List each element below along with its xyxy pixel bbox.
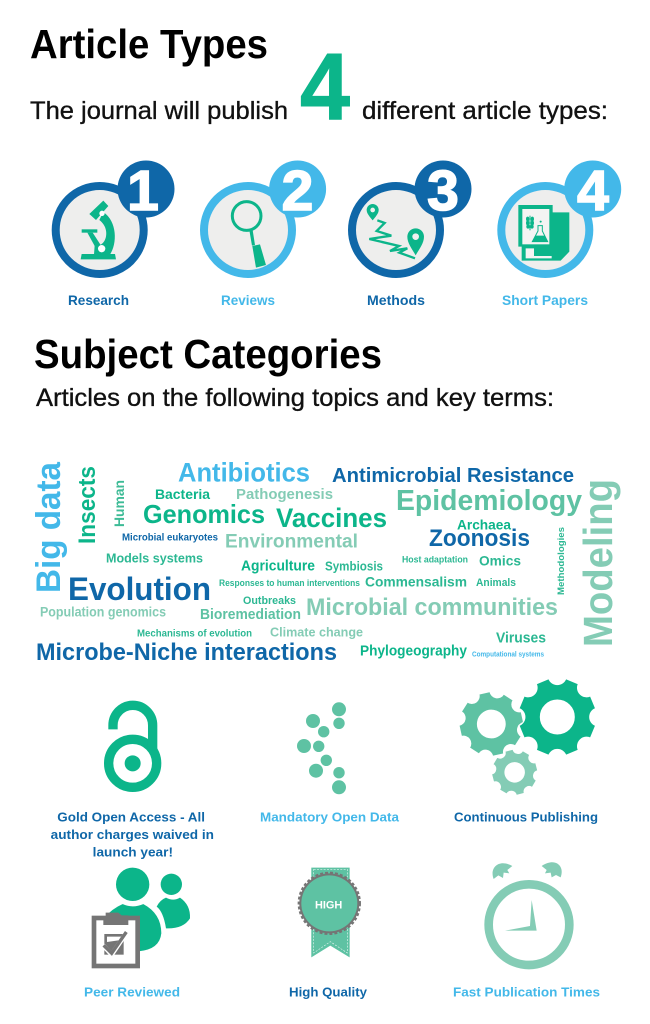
word: Bacteria: Bacteria [155, 487, 210, 502]
word: Genomics: Genomics [143, 499, 265, 529]
word: Epidemiology: Epidemiology [396, 485, 582, 517]
icon: alarm clock [489, 862, 569, 965]
word: Phylogeography: Phylogeography [360, 642, 468, 660]
word: Models systems: Models systems [106, 550, 203, 566]
heading: Subject Categories: Subject Categories [34, 331, 382, 377]
word: Antibiotics: Antibiotics [178, 458, 310, 488]
word: Omics: Omics [479, 552, 521, 568]
label: Research: Research [68, 292, 129, 308]
word: Insects: Insects [74, 466, 101, 544]
label: Gold Open Access [51, 811, 214, 860]
icon: number badge 1: 1 [127, 159, 159, 223]
word: Vaccines: Vaccines [276, 503, 387, 533]
word: Climate change: Climate change [270, 626, 363, 640]
article type: Reviews [204, 159, 326, 308]
word: Commensalism: Commensalism [365, 574, 467, 590]
icon: gears [455, 679, 596, 798]
icon: number badge 1 [118, 159, 174, 223]
word: Human: Human [111, 480, 127, 527]
label: Methods: Methods [367, 292, 425, 308]
word: Microbe-Niche interactions: Microbe-Niche interactions [36, 639, 337, 666]
feature: Gold Open Access [51, 705, 214, 860]
label: Short Papers: Short Papers [502, 292, 588, 308]
label: High Quality: High Quality [289, 986, 367, 1000]
word: Zoonosis: Zoonosis [429, 525, 530, 552]
word: Computational systems: Computational systems [472, 650, 544, 658]
icon: paper documents [518, 205, 569, 261]
icon: open access padlock [109, 705, 157, 787]
label: Gold Open Access: launch year! [93, 846, 173, 860]
label: Fast Publication Times: Fast Publication Times [453, 986, 600, 1000]
label: Reviews: Reviews [221, 292, 275, 308]
label: Gold Open Access: author charges waived in [51, 828, 214, 842]
word: Microbial communities: Microbial communities [306, 594, 558, 621]
icon: number badge 3: 3 [427, 159, 459, 223]
icon: number badge 4 [564, 159, 621, 223]
feature: Continuous Publishing [454, 679, 598, 825]
icon: number badge 3 [414, 159, 472, 223]
word: Host adaptation: Host adaptation [402, 554, 468, 566]
word: Bioremediation: Bioremediation [200, 606, 301, 623]
feature: Peer Reviewed [84, 868, 190, 1000]
icon: reviews circle [204, 186, 292, 274]
icon: methods circle [352, 186, 440, 274]
icon: data dots [297, 702, 346, 794]
word: Modeling: Modeling [575, 479, 621, 647]
word: Microbial eukaryotes: Microbial eukaryotes [122, 532, 218, 544]
word: Big data: Big data [30, 461, 68, 593]
word: Methodologies: Methodologies [556, 527, 567, 595]
word: Animals: Animals [476, 577, 516, 589]
intro text: different article types: different article types: [362, 97, 608, 125]
intro text: the journal will publish: The journal will publish [30, 97, 288, 125]
article type: Methods [352, 159, 472, 308]
icon: clipboard [94, 913, 138, 966]
label: Mandatory Open Data: Mandatory Open Data [260, 811, 400, 825]
icon: research circle [56, 186, 144, 274]
label: Gold Open Access: Gold Open Access - All [57, 811, 205, 825]
big number 4: 4 [300, 34, 350, 140]
icon: people [103, 868, 190, 952]
word: Pathogenesis: Pathogenesis [236, 487, 333, 503]
icon: route with map pins [367, 204, 424, 258]
word: Environmental: Environmental [225, 532, 358, 552]
word: Symbiosis: Symbiosis [325, 560, 383, 574]
feature: High Quality [289, 868, 367, 1000]
heading: Article Types: Article Types [30, 21, 268, 67]
feature: Fast Publication Times [453, 862, 600, 1000]
word: Antimicrobial Resistance: Antimicrobial Resistance [332, 465, 574, 487]
word: Population genomics: Population genomics [40, 604, 166, 620]
icon: number badge 4: 4 [577, 159, 609, 223]
word cloud [30, 458, 621, 666]
label: Peer Reviewed: Peer Reviewed [84, 986, 180, 1000]
word: Outbreaks: Outbreaks [243, 595, 296, 607]
article type: Short Papers [501, 159, 621, 308]
icon: magnifying glass [232, 202, 266, 268]
feature: Mandatory Open Data [260, 702, 400, 825]
word: Agriculture: Agriculture [241, 558, 315, 574]
icon: number badge 2 [269, 159, 326, 223]
icon: quality ribbon badge: HIGH [315, 899, 342, 911]
word: Mechanisms of evolution: Mechanisms of evolution [137, 628, 252, 640]
label: Continuous Publishing: Continuous Publishing [454, 811, 598, 825]
word: Viruses: Viruses [496, 630, 546, 646]
icon: number badge 2: 2 [282, 159, 313, 223]
icon: microscope [81, 201, 116, 259]
word: Responses to human interventions: Responses to human interventions [219, 578, 360, 588]
word: Archaea: Archaea [457, 518, 511, 532]
article type: Research [56, 159, 174, 308]
icon: short papers circle [501, 186, 589, 274]
word: Evolution: Evolution [68, 571, 211, 607]
intro text: topics and key terms: Articles on the following topics and key terms: [36, 384, 554, 412]
